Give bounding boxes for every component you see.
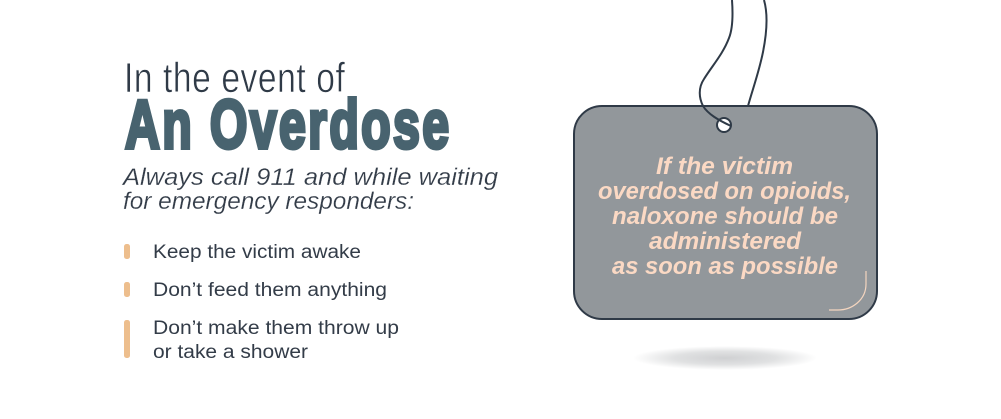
hanging tag (574, 0, 877, 319)
tag message (598, 153, 851, 280)
list item: do not feed: Don’t feed them anything (153, 280, 387, 301)
tag message: If the victim (656, 153, 793, 180)
list item: do not make them throw up (124, 318, 399, 363)
list item: keep awake: Keep the victim awake (153, 242, 361, 263)
tag body (574, 106, 877, 319)
title line 2: An Overdose (125, 85, 449, 163)
tag message: administered (649, 228, 802, 255)
title line 1: In the event of (124, 56, 345, 102)
left string (700, 0, 733, 126)
subtitle: Always call 911 and while waiting (121, 164, 499, 191)
right string (748, 0, 767, 106)
list item: do not make them throw up: Don’t make them throw up (153, 318, 399, 339)
tag hole (717, 118, 731, 132)
list item: do not make them throw up: or take a shower (153, 342, 309, 363)
tag shadow (633, 346, 817, 370)
tag message: naloxone should be (612, 203, 838, 230)
tag corner accent (829, 271, 866, 310)
subtitle (121, 164, 499, 215)
tag message: overdosed on opioids, (598, 178, 851, 205)
subtitle: for emergency responders: (123, 188, 414, 215)
heading (124, 56, 449, 163)
tag message: as soon as possible (612, 253, 838, 280)
